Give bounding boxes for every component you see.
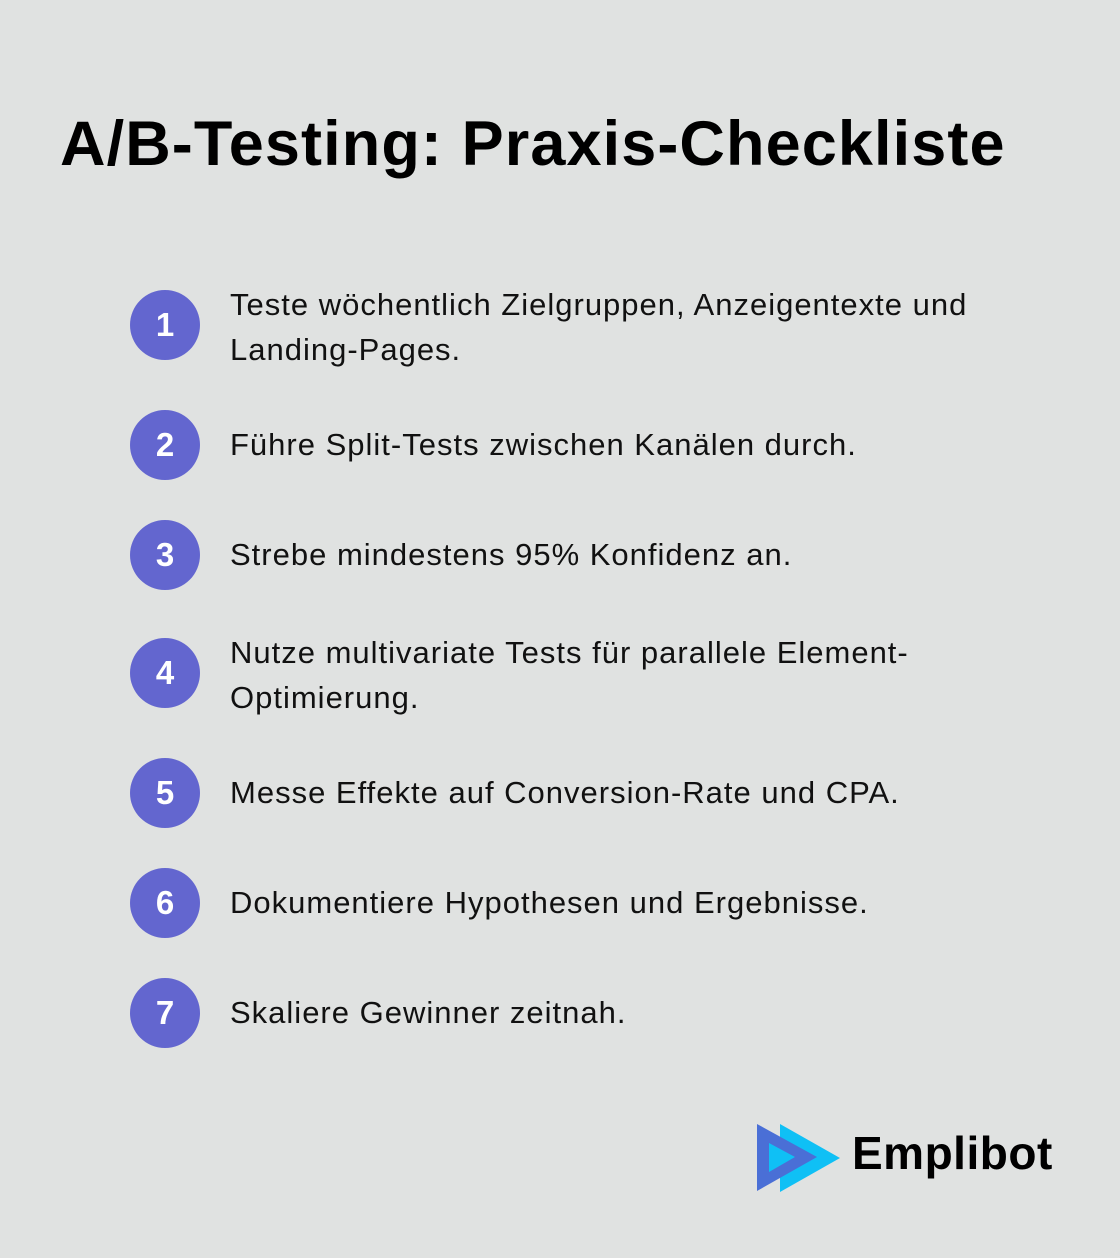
title: A/B-Testing: Praxis-Checkliste [60,109,1006,179]
item 4 [130,635,909,715]
text: 4 [156,654,174,691]
text: Führe Split-Tests zwischen Kanälen durch. [230,427,857,462]
text: 5 [156,774,174,811]
text: 6 [156,884,174,921]
text: 7 [156,994,174,1031]
icon: play triangles [757,1124,840,1192]
text: Messe Effekte auf Conversion-Rate und CPA. [230,775,900,810]
brand name: Emplibot [852,1127,1053,1179]
item 7 [130,978,626,1048]
text: Skaliere Gewinner zeitnah. [230,995,626,1030]
item 6 [130,868,869,938]
item 3 [130,520,792,590]
text: Strebe mindestens 95% Konfidenz an. [230,537,792,572]
item 1 [130,287,967,367]
text: Teste wöchentlich Zielgruppen, Anzeigentexte und [230,287,967,322]
text: Nutze multivariate Tests für parallele Element- [230,635,909,670]
text: 2 [156,426,174,463]
text: Landing-Pages. [230,332,461,367]
logo [757,1124,1053,1192]
item 2 [130,410,857,480]
text: Dokumentiere Hypothesen und Ergebnisse. [230,885,869,920]
text: 3 [156,536,174,573]
text: Optimierung. [230,680,419,715]
item 5 [130,758,900,828]
text: 1 [156,306,174,343]
